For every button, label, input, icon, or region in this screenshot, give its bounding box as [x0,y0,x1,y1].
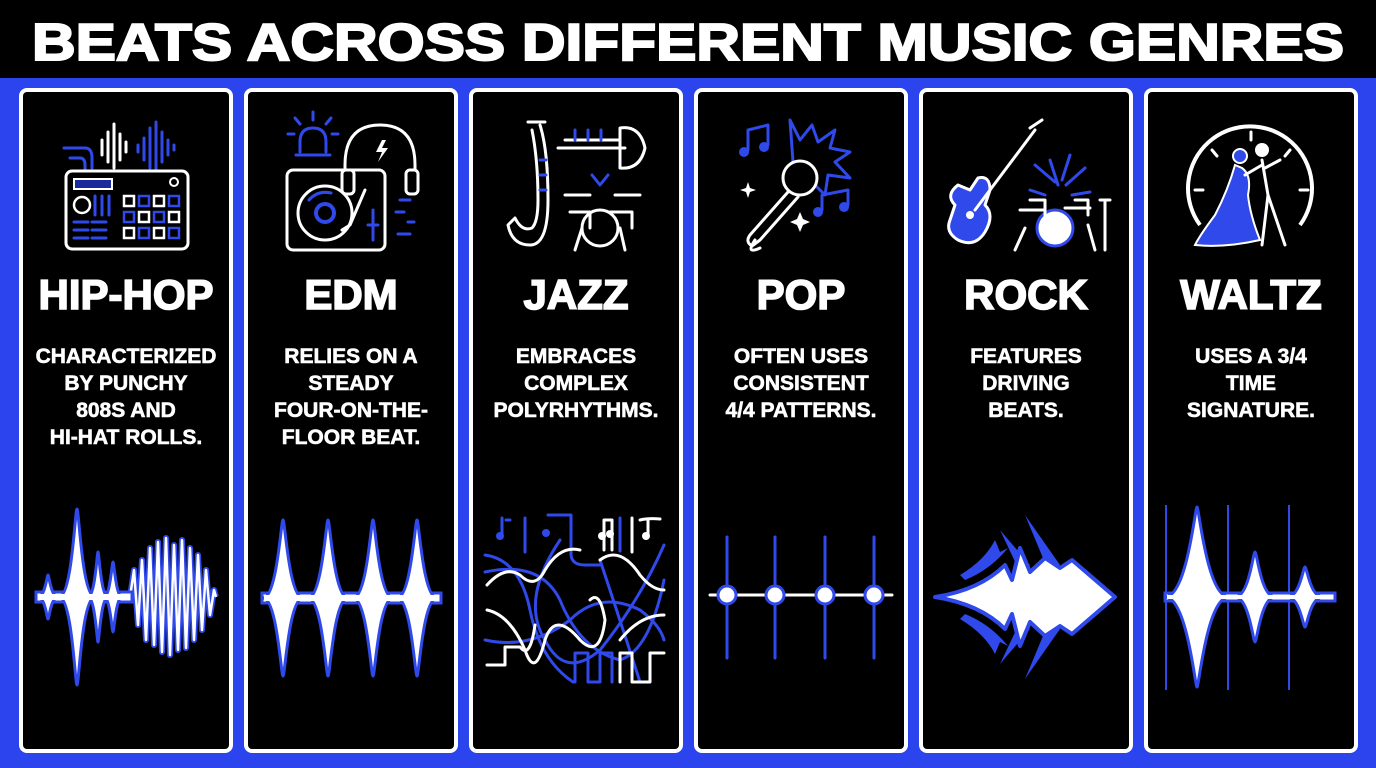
chart: pop steady beat [710,537,892,658]
icon: drum machine [64,122,188,249]
text: jazz description: POLYRHYTHMS. [494,399,658,422]
text: rock description: FEATURES [970,345,1082,368]
heading: rock: ROCK [964,271,1088,318]
text: hip-hop description: BY PUNCHY [64,372,188,395]
title bar [0,0,1376,78]
title bar: BEATS ACROSS DIFFERENT MUSIC GENRES [32,14,1344,72]
heading: jazz: JAZZ [524,271,628,318]
text: edm description: RELIES ON A [284,345,418,368]
text: pop description: CONSISTENT [733,372,869,395]
heading: hip-hop: HIP-HOP [38,271,214,318]
panel: hip-hop [21,90,231,751]
text: waltz description: SIGNATURE. [1187,399,1315,422]
panel: pop [696,90,906,751]
panel: jazz [471,90,681,751]
chart: jazz polyrhythms [485,515,664,682]
text: jazz description: EMBRACES [516,345,636,368]
heading: waltz: WALTZ [1180,271,1322,318]
text: edm description: FOUR-ON-THE- [274,399,428,422]
heading: edm: EDM [304,271,398,318]
text: hip-hop description: HI-HAT ROLLS. [50,426,202,449]
chart: edm four-on-the-floor [262,520,441,676]
chart: rock driving arrow [935,515,1115,679]
icon: guitar and drums [949,120,1110,250]
text: jazz description: COMPLEX [524,372,628,395]
chart: waltz 3/4 waveform [1165,505,1335,690]
heading: pop: POP [757,271,845,318]
chart: hip-hop waveform [36,509,216,685]
text: waltz description: USES A 3/4 [1195,345,1307,368]
text: hip-hop description: 808S AND [76,399,176,422]
icon: turntable and headphones [287,112,418,250]
text: edm description: STEADY [308,372,394,395]
icon: dancing couple in clock [1188,126,1312,246]
panel: waltz [1146,90,1356,751]
text: rock description: DRIVING [982,372,1070,395]
text: waltz description: TIME [1226,372,1276,395]
icon: microphone [739,120,850,250]
panel: edm [246,90,456,751]
text: pop description: OFTEN USES [734,345,868,368]
text: hip-hop description: CHARACTERIZED [36,345,216,368]
panel: rock [921,90,1131,751]
text: rock description: BEATS. [988,399,1064,422]
text: pop description: 4/4 PATTERNS. [726,399,876,422]
icon: saxophone trumpet drums [508,122,645,250]
text: edm description: FLOOR BEAT. [282,426,420,449]
